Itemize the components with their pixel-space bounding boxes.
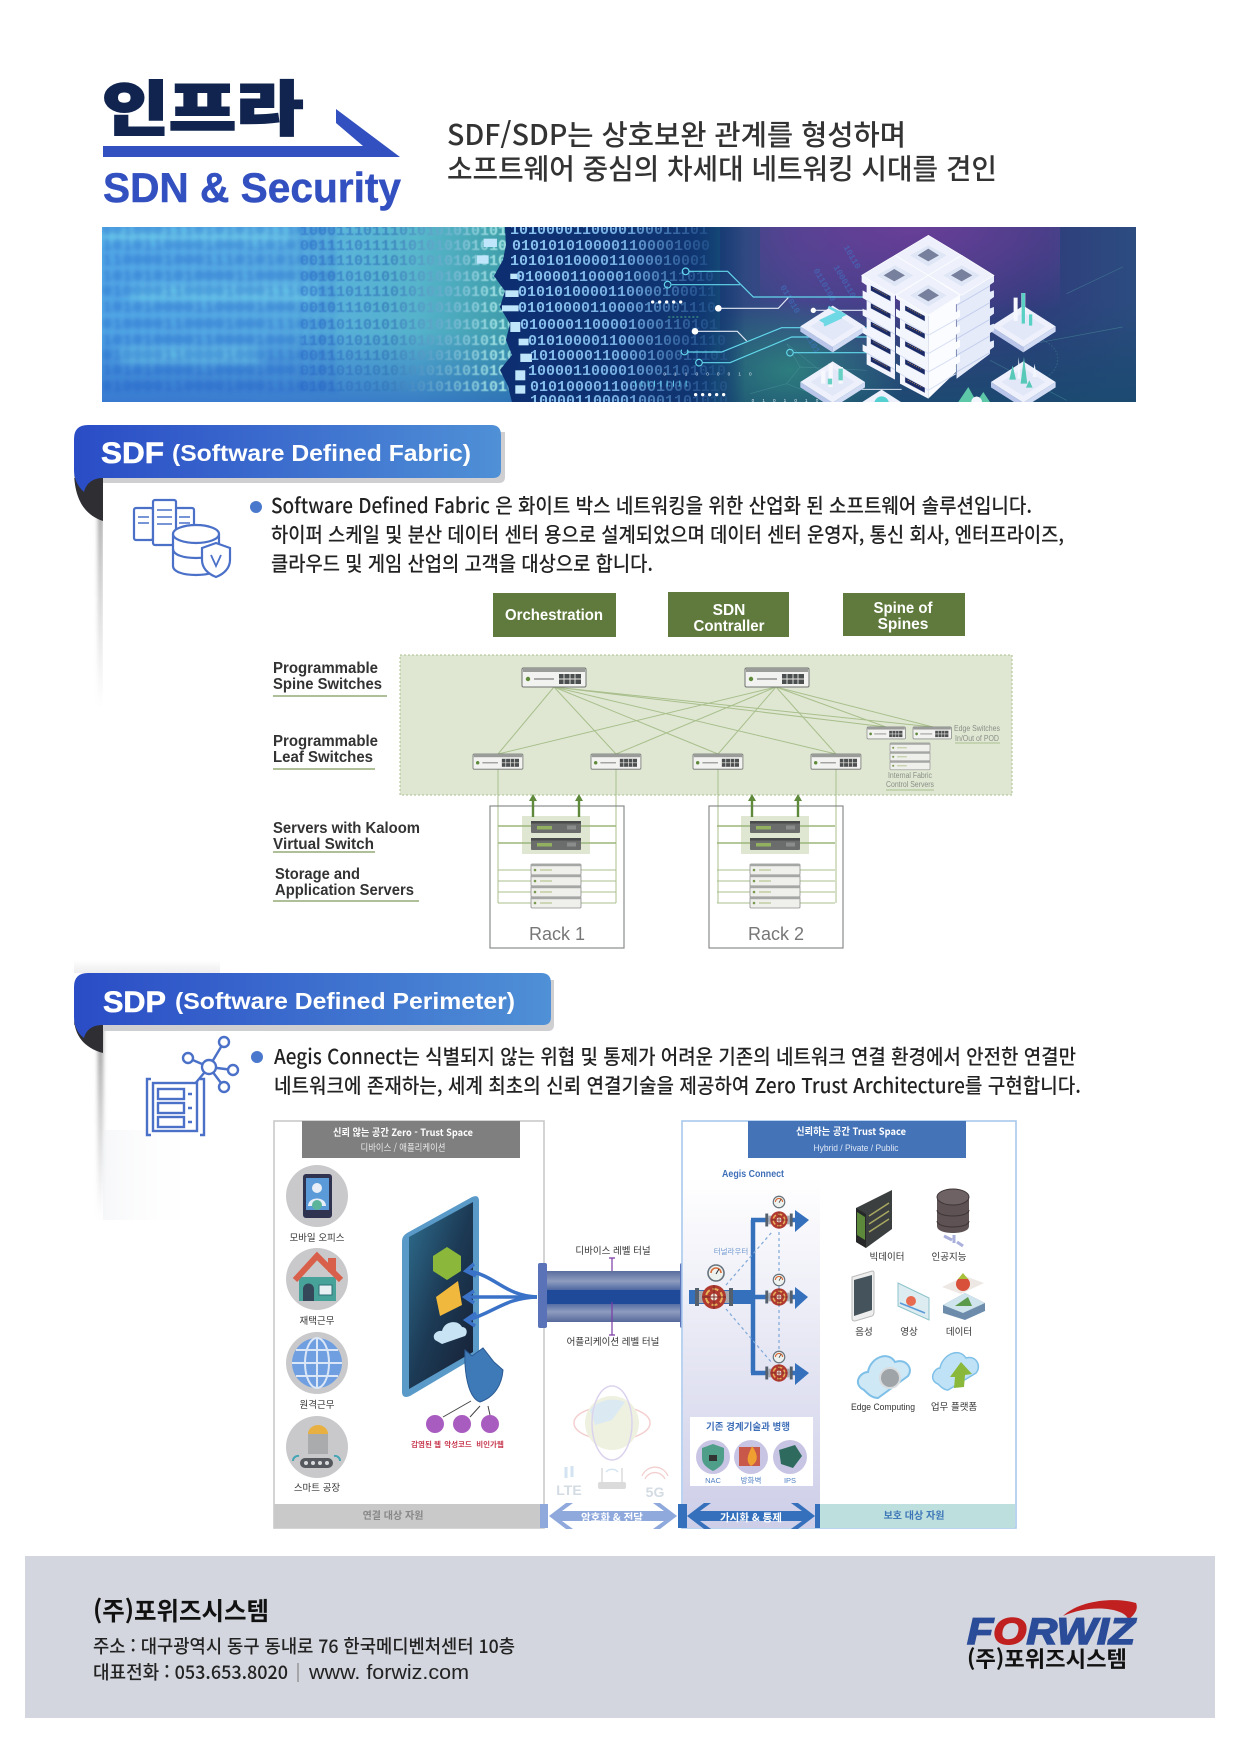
control boxes: Contraller [694,618,764,635]
tier labels: Leaf Switches [273,749,373,766]
arrow underline [103,109,400,157]
label: 업무 플랫폼 [931,1399,977,1413]
SDF header bar [74,425,501,492]
network web lines [750,267,1123,402]
SDF header text: SDF [101,437,164,470]
tier labels: Application Servers [275,882,414,899]
minor labels: Internal Fabric [888,771,932,780]
threats [411,1401,504,1450]
blurred binary digits: 01000011000010001110101 [102,283,337,302]
blurred binary digits: 10101000011000010001101 [102,332,337,351]
threats: 악성코드 [444,1439,472,1450]
icon: servers and secured database [134,500,230,577]
rack 2: Rack 2 [748,924,804,944]
icon: chip [433,1247,461,1280]
faint data streams [777,243,862,355]
bullet [251,1051,263,1063]
SDP architecture diagram [274,1121,1016,1529]
SDP header bar [74,973,551,1038]
sharp binary digits: 0100001100001000110101 [520,317,718,334]
tier labels: Virtual Switch [273,836,374,853]
label: 영상 [900,1324,918,1338]
blurred binary digits: 01000011000010001110101 [102,316,337,335]
zone: zero-trust space [274,1121,544,1528]
panel left shadow [98,478,103,706]
title block [102,62,402,211]
icon: video [898,1283,929,1320]
blurred binary digits: 00100011101010101110101 [102,222,337,241]
blurred binary digits: 01000011000010001110101 [102,347,337,366]
tunnel pipe [538,1243,690,1348]
label: 음성 [855,1324,873,1338]
footer: protected resources: 보호 대상 자원 [884,1507,944,1522]
banner background [102,227,1136,402]
trust header [748,1121,966,1158]
rack 1: Rack 1 [529,924,585,944]
SDF description [271,489,1064,577]
phone with shield and apps [402,1196,537,1450]
panel left shadow [98,1025,103,1220]
slots left stack [871,285,891,301]
arrow: encryption and delivery [540,1503,677,1529]
right-side detail drawn at zoom scale: 0 1 0 1 0 1 0 [752,398,819,403]
footer: connected resources [274,1504,540,1528]
tier labels: Programmable [273,660,378,677]
label: 원격근무 [300,1397,335,1411]
mid-focus binary digits: 001110111010101010101010 [300,348,516,365]
control boxes: SDN [713,602,745,619]
circuit traces [664,268,870,366]
SDP header text: SDP [103,986,166,1019]
sharp binary digits: 1010101000011000010001 [510,253,708,270]
subtitle: SDN & Security: SDN & Security [103,164,402,211]
phone and website [93,1659,469,1685]
mid-focus binary digits: 110101010101010101010101 [300,333,516,350]
label: Edge Computing [851,1402,915,1413]
sharp binary digits: 0101010000110000100011 [518,284,716,301]
arrow: visibility and control: 가시화 & 통제 [720,1510,782,1525]
label: 데이터 [946,1324,972,1338]
label: 스마트 공장 [294,1480,340,1494]
tier labels: Programmable [273,733,378,750]
Aegis Connect label: Aegis Connect [722,1169,785,1180]
label: 빅데이터 [870,1249,904,1263]
tunnel router network [689,1196,809,1385]
legacy perimeter box: 방화벽 [741,1475,761,1486]
sharp binary digits: 0101000011000010001110 [518,300,716,317]
address: 주소 : 대구광역시 동구 동내로 76 한국메디벤처센터 10층 [93,1633,515,1659]
link arrows [465,1264,537,1326]
top tiles [895,235,962,275]
threats: 비인가웹 [476,1439,504,1450]
SDF header ribbon fold [74,470,103,521]
small platform tiles [800,293,1056,443]
mid-focus binary digits: 100011101110101010101010 [300,223,516,240]
icon: network hub and server [147,1037,238,1135]
rack 2 [709,794,843,948]
control boxes: Orchestration [505,607,603,624]
sharp binary digits: 0101000011000010001110 [528,333,726,350]
trust header: Hybrid / Pivate / Public [814,1143,899,1154]
Aegis Connect panel [683,1178,820,1528]
sharp binary digits [510,222,728,410]
tagline [447,113,997,188]
sharp binary digits: 0101010100001100001000 [512,238,710,255]
mid-focus binary digits [300,223,516,396]
network access: globe, LTE, router, 5G [556,1386,668,1500]
SDF description: Software Defined Fabric 은 화이트 박스 네트워킹을 위한 산업화 된 소프트웨어 솔루션입니다. [271,489,1032,519]
tier labels: Storage and [275,866,360,883]
tunnel labels: 디바이스 레벨 터널 [575,1243,651,1257]
SDP header text [103,986,515,1019]
network access: globe, LTE, router, 5G: 5G [646,1484,664,1500]
SDP description: Aegis Connect는 식별되지 않는 위협 및 통제가 어려운 기존의 네트워크 연결 환경에서 안전한 연결만 [274,1040,1076,1070]
icon: remote work globe [286,1332,348,1394]
footer: protected resources [820,1504,1015,1528]
threats: 감염된 웹 [411,1439,441,1450]
faint data streams: 0110100 [811,267,838,303]
SDP description: 네트워크에 존재하는, 세계 최초의 신뢰 연결기술을 제공하여 Zero Trust Architecture를 구현합니다. [274,1069,1081,1099]
control boxes [493,592,965,637]
tier labels [273,660,420,901]
sharp binary digits: 1010000110000100011101 [530,348,728,365]
tunnel labels: 어플리케이션 레벨 터널 [567,1334,659,1348]
arrow: encryption and delivery: 암호화 & 전달 [581,1510,643,1525]
icon: shield [465,1348,503,1402]
SDP header ribbon fold [74,1017,103,1053]
logo: FORWIZ: FORWIZ [967,1611,1137,1652]
icon: mobile office [286,1165,348,1227]
spine-leaf links [498,687,933,903]
SDF header text: (Software Defined Fabric) [172,440,471,466]
zero-trust header [302,1121,520,1158]
sharp binary digits: 0100001100001000111010 [516,269,714,286]
right-side detail drawn at zoom scale: 0 1 1 0 0 0 0 1 0 [663,371,752,376]
blurred binary digits [102,222,337,397]
minor labels: In/Out of POD [955,734,999,743]
mid-focus binary digits: 001111011111010101010101 [300,238,516,255]
sharp binary digits: 1000011000010001101010 [530,393,728,410]
logo: FORWIZ [967,1600,1137,1674]
icon: data layers [942,1273,985,1320]
mid-focus binary digits: 010101101010101010101010 [300,317,516,334]
zone: trust space [678,1121,1016,1529]
server tower [862,235,994,399]
network access: globe, LTE, router, 5G: LTE [556,1482,582,1498]
blurred binary digits: 10101000011000010001101 [102,362,337,381]
icon: AI database [937,1189,969,1246]
icon: folder [436,1281,462,1316]
trust header: 신뢰하는 공간 Trust Space [796,1123,906,1138]
mid-focus binary digits: 001010101010101010101010 [300,269,516,286]
binary edge highlights [477,239,532,394]
company name: (주)포위즈시스템 [93,1592,269,1628]
faint data streams: 1000110 [831,263,858,300]
panel: SDF section [74,425,1064,948]
tagline: 소프트웨어 중심의 차세대 네트워킹 시대를 견인 [447,147,997,188]
bullet [250,501,262,513]
back stacks [946,276,994,378]
rack 1 [490,794,624,948]
control boxes: Spines [878,616,928,633]
zero-trust header: 신뢰 않는 공간 Zero - Trust Space [333,1124,473,1139]
icon: cloud [434,1322,467,1344]
minor labels [886,724,1000,790]
SDF description: 클라우드 및 게임 산업의 고객을 대상으로 합니다. [271,547,653,577]
phone and website: www. forwiz.com [308,1662,469,1684]
mid-focus binary digits: 001011101010101010101010 [300,300,516,317]
navy digit block behind sharp digits [494,227,745,402]
sharp binary digits: 1000011000010001101010 [528,363,726,380]
icon: voice phone [852,1271,874,1321]
faint data streams: 101101 [797,323,822,355]
icon: home office [286,1248,348,1310]
fabric zone [400,655,1012,795]
sharp binary digits: 1010000110000100011101 [510,222,708,239]
SDP description [274,1040,1081,1099]
mid-focus binary digits: 010110101010101010101010 [300,379,516,396]
label: 인공지능 [932,1249,967,1263]
mid-focus binary digits: 010101010101010101010101 [300,363,516,380]
tunnel labels [567,1243,659,1348]
icon: big data rack [856,1190,892,1248]
front stack [896,295,928,399]
icon: smart factory [286,1416,348,1478]
logo: FORWIZ: (주)포위즈시스템 [967,1642,1127,1674]
label: 재택근무 [300,1313,335,1327]
SDF header text [101,437,471,470]
tier labels: Spine Switches [273,676,382,693]
switches [473,668,951,770]
phone and website: 대표전화 : 053.653.8020 [93,1659,288,1685]
legacy perimeter box: 기존 경계기술과 병행 [706,1419,790,1433]
faint data streams: 011010 [777,283,802,315]
blurred binary digits: 10101000011000010001101 [102,299,337,318]
SDF header shadow [103,432,505,483]
panel: SDP section [74,960,1081,1529]
control boxes: Spine of [874,600,933,617]
mid-focus binary digits: 001111011101010101010101 [300,253,516,270]
legacy perimeter box: NAC [705,1476,721,1485]
blurred binary digits: 10101010100001100001000 [102,268,337,287]
title: 인프라: 인프라 [102,62,303,147]
SDP header text: (Software Defined Perimeter) [175,988,515,1014]
tunnel router network: 터널라우터 [714,1246,748,1257]
legacy perimeter box [690,1417,813,1486]
SDF description: 하이퍼 스케일 및 분산 데이터 센터 용으로 설계되었으며 데이터 센터 운영자, 통신 회사, 엔터프라이즈, [271,518,1064,548]
footer: connected resources: 연결 대상 자원 [363,1507,423,1522]
label: 모바일 오피스 [289,1230,345,1244]
tagline: SDF/SDP는 상호보완 관계를 형성하며 [447,113,906,154]
icon: edge computing cloud [858,1356,910,1398]
zero-trust header: 디바이스 / 애플리케이션 [360,1140,446,1154]
SDF fabric diagram [273,592,1012,948]
blurred binary digits: 10101100001000110101011 [102,237,337,256]
right-side detail drawn at zoom scale [635,235,1123,402]
tier labels: Servers with Kaloom [273,820,420,837]
icon: business platform cloud [933,1353,978,1390]
sharp binary digits: 0101000011000010001110 [530,379,728,396]
blurred binary digits: 01000011000010001110101 [102,378,337,397]
hero banner: binary data and server tower [102,227,1136,402]
arrow: visibility and control [678,1503,820,1529]
blurred binary digits: 11000010001110101010110 [102,252,337,271]
minor labels: Control Servers [886,780,934,789]
faint data streams: 10110 [841,243,862,271]
SDP header shadow [103,980,554,1031]
mid-focus binary digits: 001110111101010101010101 [300,284,516,301]
minor labels: Edge Switches [954,724,1000,733]
footer [25,1556,1215,1718]
legacy perimeter box: IPS [784,1476,796,1485]
